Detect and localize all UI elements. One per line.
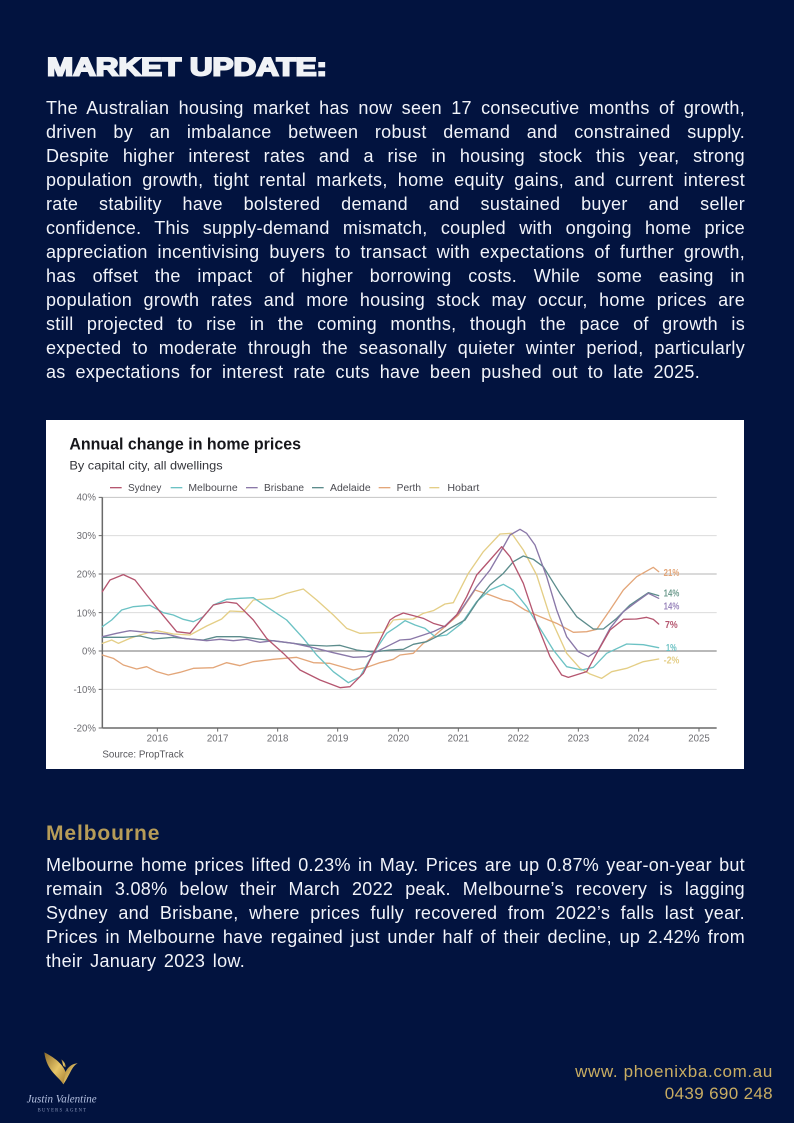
chart legend (110, 483, 480, 494)
chart series lines (102, 529, 659, 688)
chart axes and gridlines: 2018 (267, 733, 288, 744)
chart axes and gridlines (73, 493, 717, 744)
text block: market update: rate stability have bolstered demand and sustained buyer and seller (46, 194, 745, 214)
chart legend: Adelaide (330, 483, 371, 494)
text block: market update: expected to moderate through the seasonally quieter winter period, particularly (46, 338, 745, 358)
chart end labels (664, 568, 679, 667)
chart axes and gridlines: -20% (73, 724, 96, 735)
logo: Justin Valentine Buyers Agent (26, 1052, 97, 1114)
text block: market update (46, 98, 745, 382)
chart axes and gridlines: 2025 (688, 733, 710, 744)
logo name: Justin Valentine (27, 1092, 97, 1105)
text block: market update: population growth rates and more housing stock may occur, home prices are (46, 290, 745, 310)
chart source: Source: PropTrack (102, 749, 184, 760)
text block: Melbourne: Sydney and Brisbane, where prices fully recovered from 2022’s falls last year. (46, 903, 745, 923)
chart end labels: 7% (665, 620, 678, 631)
text block: market update: still projected to rise in the coming months, though the pace of growth is (46, 314, 745, 334)
chart axes and gridlines: 2016 (147, 733, 168, 744)
chart legend: Melbourne (188, 483, 238, 494)
chart axes and gridlines: 2020 (388, 733, 409, 744)
chart axes and gridlines: 2017 (207, 733, 228, 744)
chart axes and gridlines: 2019 (327, 733, 348, 744)
chart axes and gridlines: 40% (77, 493, 96, 504)
text block: Melbourne (46, 855, 745, 971)
text block: market update: as expectations for interest rate cuts have been pushed out to late 2025. (46, 362, 700, 382)
chart axes and gridlines: 2022 (508, 733, 529, 744)
website and phone contact: www. phoenixba.com.au (575, 1062, 773, 1081)
chart legend: Hobart (447, 483, 480, 494)
chart legend: Brisbane (264, 483, 304, 494)
chart axes and gridlines: 2021 (448, 733, 469, 744)
text block: market update: Despite higher interest rates and a rise in housing stock this year, strong (46, 146, 745, 166)
chart axes and gridlines: 10% (77, 608, 96, 619)
text block: market update: population growth, tight rental markets, home equity gains, and current interest (46, 170, 745, 190)
text block: market update: has offset the impact of higher borrowing costs. While some easing in (46, 266, 745, 286)
website and phone contact (575, 1062, 773, 1102)
website and phone contact: 0439 690 248 (665, 1084, 773, 1102)
chart end labels: 1% (666, 643, 677, 654)
text block: market update: appreciation incentivising buyers to transact with expectations of further growth, (46, 242, 745, 262)
heading: Melbourne: Melbourne (46, 822, 160, 845)
chart heading (69, 435, 301, 473)
line chart: annual change in home prices (46, 420, 744, 769)
chart end labels: 21% (664, 568, 679, 579)
chart end labels: -2% (664, 656, 679, 667)
title: MARKET UPDATE: (47, 54, 327, 82)
text block: market update: driven by an imbalance between robust demand and constrained supply. (46, 122, 745, 142)
chart axes and gridlines: 2023 (568, 733, 589, 744)
chart heading: Annual change in home prices (69, 435, 301, 453)
chart end labels: 14% (664, 601, 679, 612)
text block: market update: The Australian housing market has now seen 17 consecutive months of growth, (46, 98, 745, 118)
chart heading: By capital city, all dwellings (69, 460, 223, 473)
chart end labels: 14% (664, 589, 679, 600)
icon: golden wings (44, 1052, 78, 1084)
text block: market update: confidence. This supply-demand mismatch, coupled with ongoing home price (46, 218, 745, 238)
logo tagline: BUYERS AGENT (38, 1109, 86, 1114)
chart axes and gridlines: 0% (82, 647, 96, 658)
text block: Melbourne: Melbourne home prices lifted 0.23% in May. Prices are up 0.87% year-on-year but (46, 855, 745, 875)
chart legend: Sydney (128, 483, 161, 494)
chart axes and gridlines: 20% (77, 570, 96, 581)
text block: Melbourne: Prices in Melbourne have regained just under half of their decline, up 2.42% from (46, 927, 745, 947)
chart axes and gridlines: 2024 (628, 733, 650, 744)
chart axes and gridlines: -10% (73, 685, 96, 696)
text block: Melbourne: their January 2023 low. (46, 951, 245, 971)
chart legend: Perth (397, 483, 421, 494)
chart axes and gridlines: 30% (77, 531, 96, 542)
text block: Melbourne: remain 3.08% below their March 2022 peak. Melbourne’s recovery is lagging (46, 879, 745, 899)
